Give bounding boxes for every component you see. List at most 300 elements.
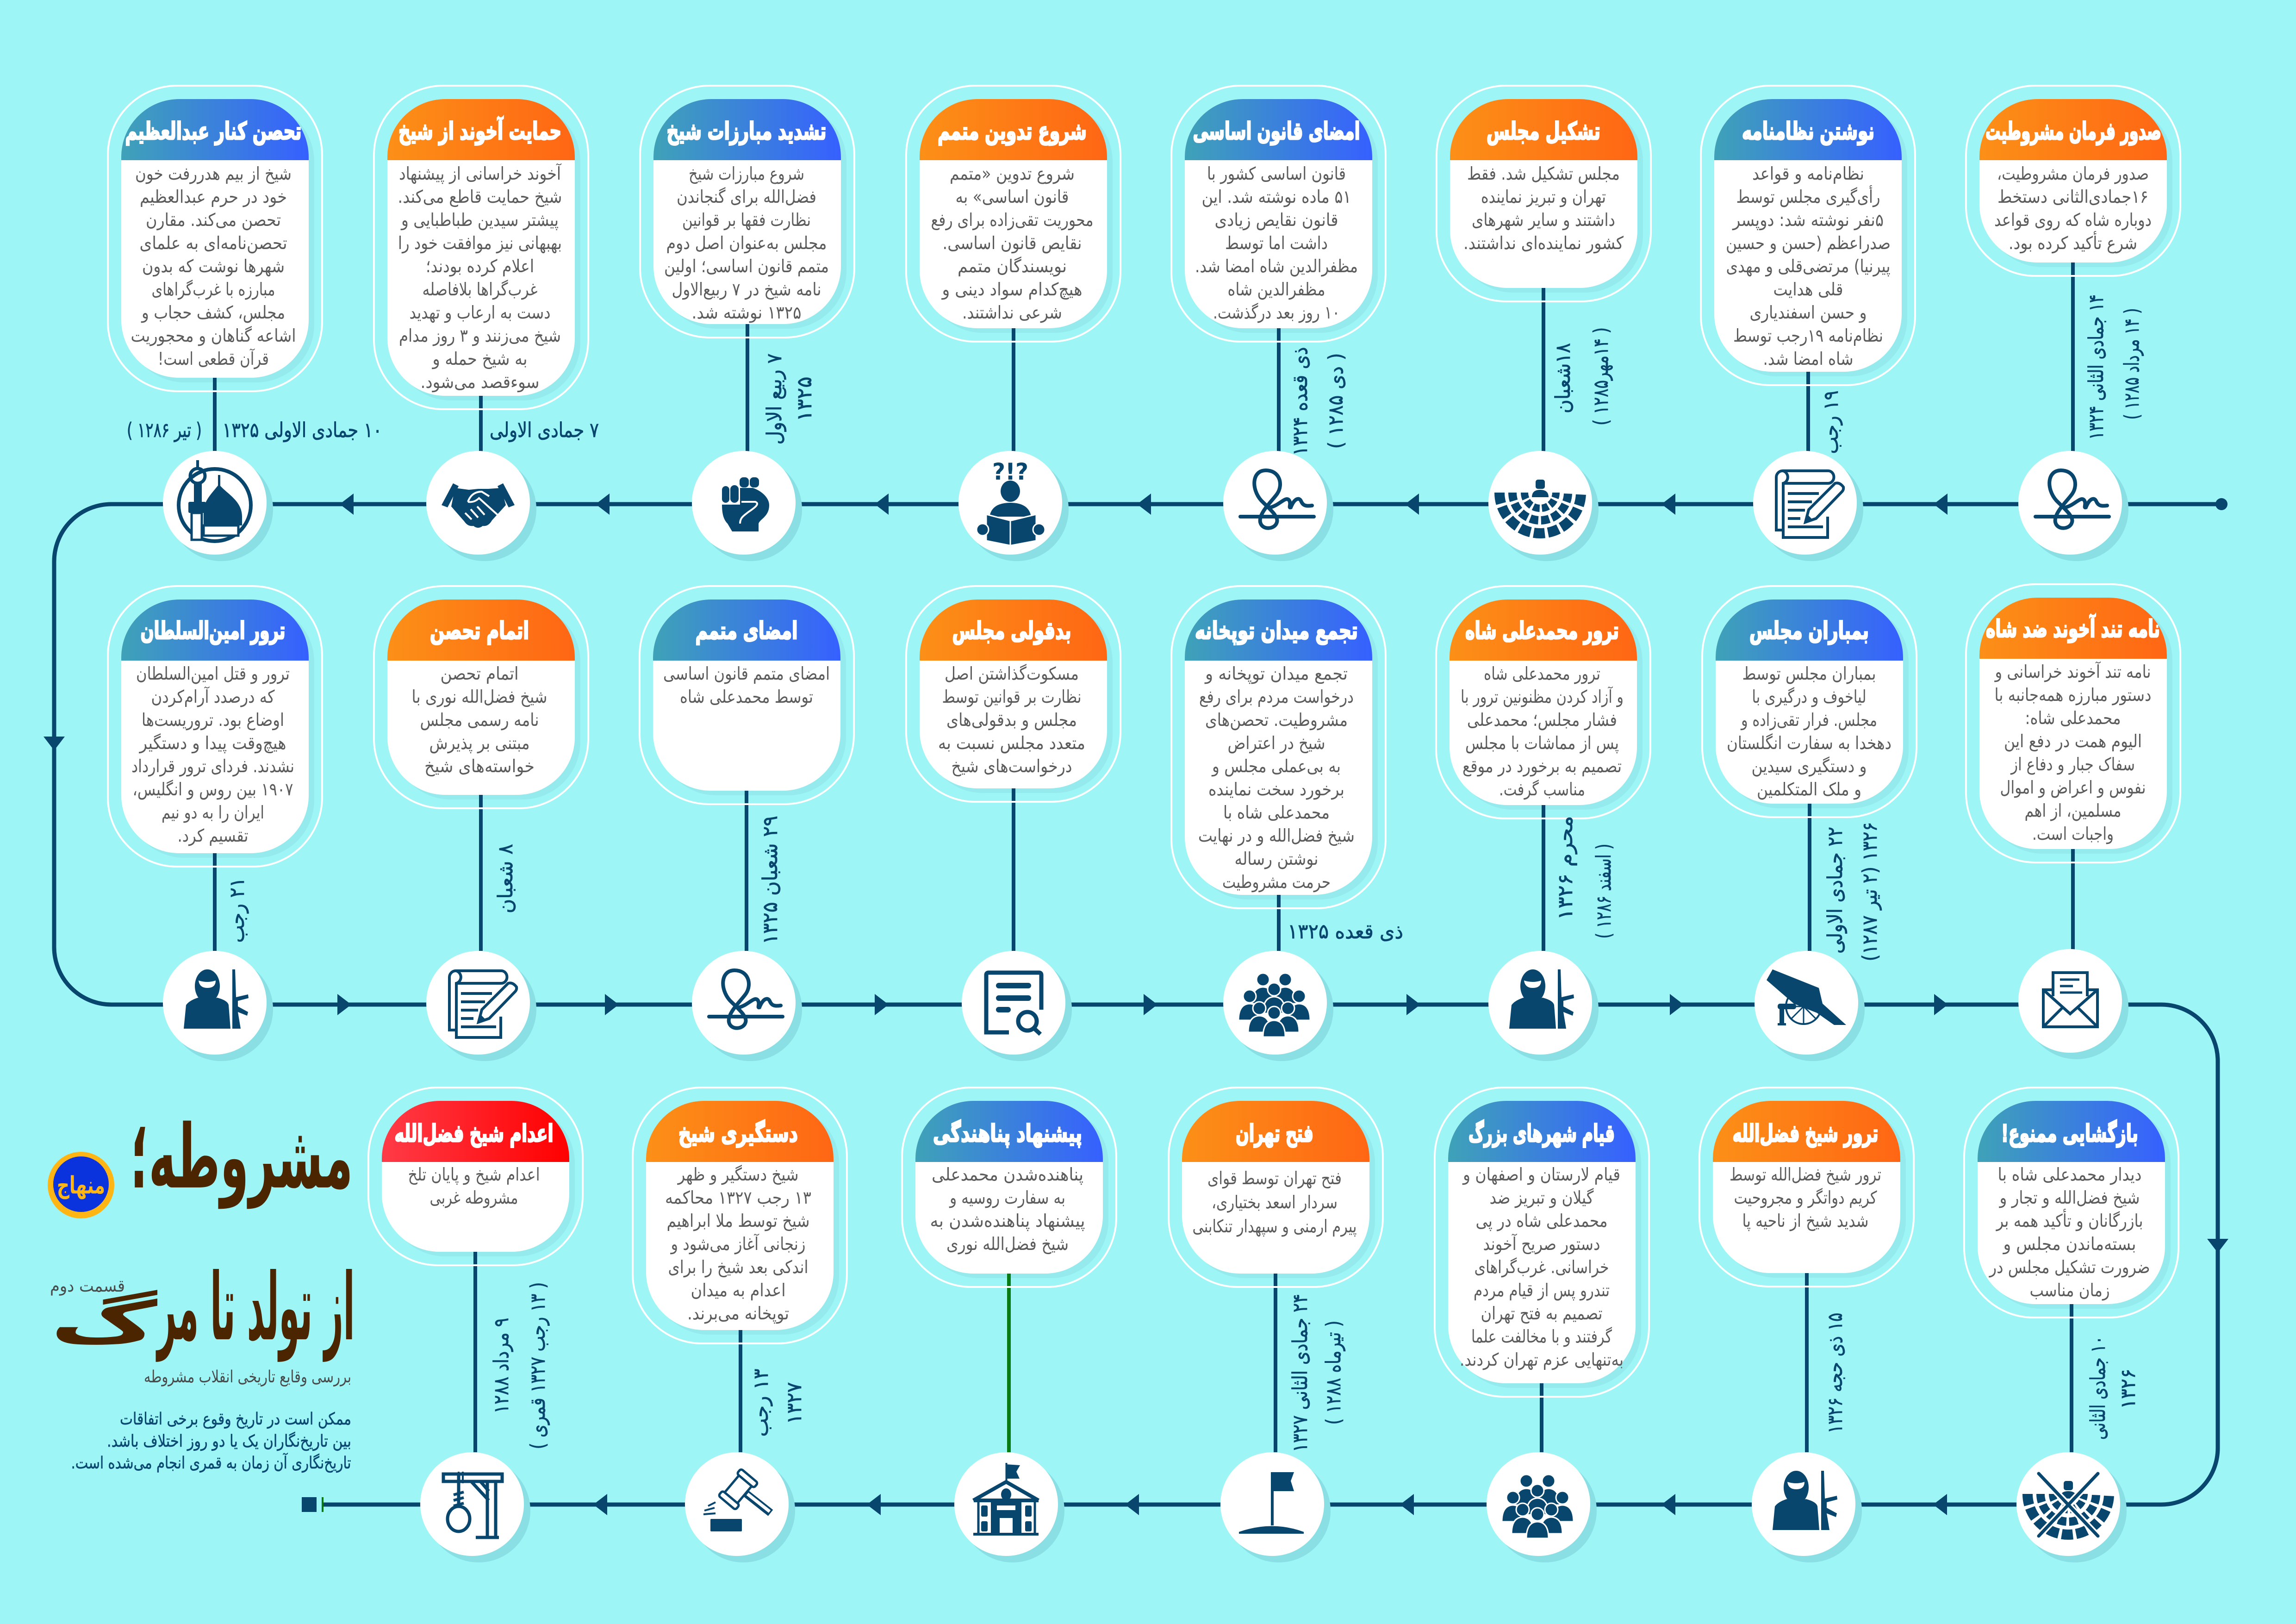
text block: ضرورت تشکیل مجلس در	[1989, 1257, 2150, 1278]
text block	[1461, 663, 1624, 800]
icon: masked gunman	[163, 951, 273, 1061]
text block: اوضاع بود. تروریست‌ها	[142, 710, 284, 731]
text block: اعدام به میدان	[691, 1280, 786, 1300]
text block	[408, 1164, 540, 1208]
heading: حمایت آخوند از شیخ	[398, 116, 561, 145]
text block: رأی‌گیری مجلس توسط	[1736, 185, 1880, 207]
logo	[48, 1152, 114, 1218]
text block: تندرو پس از قیام مردم	[1474, 1280, 1610, 1301]
icon: crowd	[1487, 1452, 1597, 1562]
icon: handshake	[426, 451, 536, 561]
panel: قیام شهرهای بزرگ	[1435, 1087, 1649, 1452]
date	[1551, 327, 1613, 425]
panel: تجمع میدان توپخانه	[1171, 586, 1386, 951]
date: ۲۱ رجب	[225, 878, 249, 943]
text block: صدور فرمان مشروطیت،	[1997, 163, 2149, 184]
date: ۷ جمادی الاولی	[490, 418, 599, 442]
date: ( تیر ۱۲۸۶ )	[127, 418, 202, 442]
icon: cannon	[1755, 951, 1865, 1061]
date	[127, 418, 382, 442]
heading: شروع تدوین متمم	[938, 118, 1087, 145]
text block	[931, 163, 1093, 323]
text block: شیخ در اعتراض	[1227, 733, 1325, 754]
panel: بازگشایی ممنوع!	[1964, 1087, 2178, 1452]
heading: بازگشایی ممنوع!	[2001, 1119, 2138, 1148]
text block: قانون اساسی» به	[955, 187, 1069, 207]
text block: شیخ فضل‌الله و تجار و	[1999, 1187, 2140, 1208]
icon: notepad and pencil	[426, 951, 536, 1061]
text block: مشروطه غربی	[429, 1187, 518, 1208]
text block: ترور محمدعلی شاه	[1484, 663, 1600, 684]
icon: crossed parliament	[2016, 1452, 2127, 1562]
text block: هیچ‌کدام سواد دینی و	[941, 279, 1082, 300]
text block: تصمیم به برخورد در موقع	[1462, 756, 1622, 777]
text block: آخوند خراسانی از پیشنهاد	[399, 163, 561, 184]
text block: قانون اساسی کشور با	[1207, 163, 1346, 184]
text block: الیوم همت در دفع این	[2004, 731, 2142, 752]
heading: فتح تهران	[1236, 1120, 1313, 1148]
text block: شرع تأکید کرده بود.	[2009, 231, 2137, 254]
panel: حمایت آخوند از شیخ	[374, 86, 588, 452]
timeline end marker	[302, 1497, 324, 1512]
text block: به سفارت روسیه و	[949, 1187, 1065, 1208]
text block: مسلمین، از اهم	[2024, 800, 2122, 821]
date: ذی قعده ۱۳۲۴	[1288, 347, 1312, 456]
heading	[1185, 99, 1372, 160]
text block: نقایص قانون اساسی.	[942, 233, 1082, 254]
date: ۲۴ جمادی الثانی ۱۳۲۷	[1288, 1294, 1312, 1452]
text block: و ملک المتکلمین	[1757, 779, 1861, 800]
text block: تصمیم به فتح تهران	[1481, 1303, 1602, 1324]
text block: پیرنیا) مرتضی‌قلی و مهدی	[1726, 256, 1890, 277]
text block	[131, 663, 294, 846]
note text block: تاریخ‌نگاری آن زمان به قمری انجام می‌شده است.	[71, 1452, 351, 1473]
text block: محمدعلی شاه:	[2025, 708, 2121, 728]
date: ۱۵ ذی حجه ۱۳۲۶	[1823, 1313, 1847, 1433]
text block: شیخ می‌زنند و ۳ روز مدام	[399, 325, 561, 346]
icon: document search	[962, 951, 1072, 1061]
text block: نظام‌نامه و قواعد	[1752, 163, 1864, 184]
date: ۲۲ جمادی الاولی	[1823, 827, 1847, 954]
date: ۱۳۲۷	[783, 1382, 806, 1424]
date	[1823, 822, 1882, 961]
panel: فتح تهران	[1169, 1087, 1383, 1452]
text block	[663, 663, 830, 707]
text block: ۱۳ رجب ۱۳۲۷ محاکمه	[665, 1187, 811, 1208]
icon: mosque	[163, 451, 273, 561]
title: گ	[50, 1289, 157, 1356]
text block: مجلس به‌عنوان اصل دوم	[666, 233, 827, 254]
text block: مجلس، کشف حجاب و	[141, 302, 285, 323]
icon: reader with question marks	[958, 451, 1069, 561]
panel: امضای متمم	[640, 586, 854, 951]
text block	[1198, 663, 1355, 893]
date	[1288, 1294, 1345, 1452]
icon: envelope	[2018, 949, 2128, 1059]
text block	[1727, 663, 1892, 800]
note text block: ممکن است در تاریخ وقوع برخی اتفاقات	[120, 1410, 351, 1429]
text block: فتح تهران توسط قوای	[1207, 1168, 1342, 1189]
date: ۱۰ جمادی الثانی	[2086, 1336, 2110, 1440]
text block: تقسیم کرد.	[178, 825, 248, 846]
icon: masked gunman	[1752, 1452, 1862, 1562]
text block: پیرم ارمنی و سپهدار تنکابنی	[1192, 1216, 1357, 1237]
date: ۱۰ جمادی الاولی ۱۳۲۵	[222, 418, 382, 442]
text block: اعلام کرده بودند؛	[426, 256, 534, 277]
text block: ۵نفر نوشته شد: دوپسر	[1732, 210, 1884, 231]
text block: نظارت فقها بر قوانین	[682, 210, 811, 231]
text block: سفاک جبار و دفاع از	[2010, 754, 2135, 775]
heading: اتمام تحصن	[430, 617, 529, 645]
icon: flag	[1220, 1452, 1331, 1562]
text block: مظفرالدین شاه	[1227, 279, 1325, 300]
text block: داشتند و سایر شهرهای	[1472, 210, 1615, 231]
panel: شروع تدوین متمم	[906, 86, 1120, 452]
arrow right vertical	[2207, 1239, 2228, 1253]
heading	[920, 99, 1107, 160]
text block: نامه شیخ در ۷ ربیع‌الاول	[672, 279, 821, 300]
text block: شیخ دستگیر و ظهر	[677, 1164, 799, 1185]
text block	[1726, 163, 1891, 369]
text block	[938, 663, 1085, 777]
text block	[398, 163, 562, 393]
date: ( ۱۳ رجب ۱۳۲۷ قمری )	[526, 1282, 550, 1449]
date: ۱۹ رجب	[1819, 391, 1843, 454]
text block: دیدار محمدعلی شاه با	[1997, 1164, 2142, 1185]
text block: شیخ حمایت قاطع می‌کند.	[398, 187, 562, 207]
text block: واجبات است.	[2032, 824, 2114, 844]
date: ۷ ربیع الاول	[763, 354, 786, 444]
text block: سوءقصد می‌شود.	[420, 372, 540, 393]
icon: gavel	[685, 1452, 795, 1562]
panel: نوشتن نظامنامه	[1701, 86, 1915, 452]
heading	[1450, 600, 1637, 661]
heading	[1450, 99, 1637, 160]
date: ۱۳۲۵	[793, 377, 816, 421]
date: ( تیرماه ۱۲۸۸ )	[1322, 1320, 1345, 1425]
date: ( اسفند ۱۲۸۶ )	[1592, 843, 1616, 939]
text block	[1730, 1164, 1881, 1231]
text block: درخواست‌های شیخ	[952, 756, 1072, 777]
text block: تهران و تبریز نماینده	[1481, 187, 1606, 207]
text block: قانون نقایص زیادی	[1214, 210, 1338, 231]
date: ( ۱۴ مرداد ۱۲۸۵ )	[2120, 308, 2144, 419]
text block: محمدعلی شاه در پی	[1475, 1211, 1608, 1231]
text block	[1994, 661, 2151, 844]
text block: متعدد مجلس نسبت به	[938, 733, 1085, 753]
heading: تحصن کنار عبدالعظیم	[125, 118, 302, 145]
arrow row 1	[340, 493, 1948, 515]
icon: crowd	[1223, 951, 1333, 1061]
panel: تشدید مبارزات شیخ	[640, 86, 854, 452]
arrow row 3	[593, 1494, 1947, 1515]
text block	[1195, 163, 1358, 323]
date: ( ۱۴مهر۱۲۸۵ )	[1589, 327, 1613, 425]
title: مشروطه؛	[131, 1106, 353, 1209]
text block: قرآن قطعی است!	[158, 348, 269, 369]
text block: ۵۱ ماده نوشته شد. این	[1201, 187, 1351, 207]
text block: زنجانی آغاز می‌شود و	[670, 1233, 805, 1255]
panel: ترور محمدعلی شاه	[1436, 586, 1650, 951]
text block: صدراعظم (حسن و حسین	[1726, 233, 1891, 254]
subtitle: بررسی وقایع تاریخی انقلاب مشروطه	[144, 1368, 351, 1387]
heading	[646, 1101, 834, 1162]
icon: signature	[1223, 451, 1333, 561]
heading: صدور فرمان مشروطیت	[1985, 118, 2161, 145]
text block: شروع تدوین «متمم	[950, 163, 1075, 184]
heading	[653, 600, 840, 661]
text block: فشار مجلس؛ محمدعلی	[1467, 710, 1617, 730]
text block: نویسندگان متمم	[958, 256, 1067, 277]
heading: ترور محمدعلی شاه	[1465, 617, 1619, 645]
text block: شیخ توسط ملا ابراهیم	[666, 1211, 810, 1231]
text block: تحصن‌نامه‌ای به علمای	[140, 233, 287, 254]
text block: اتمام تحصن	[441, 663, 518, 684]
icon: raised fist	[692, 451, 802, 561]
text block: که درصدد آرام‌کردن	[151, 686, 275, 707]
text block: به شیخ حمله و	[432, 349, 528, 369]
heading: اعدام شیخ فضل‌الله	[394, 1120, 554, 1148]
text block: خود در حرم عبدالعظیم	[140, 187, 287, 207]
text block: بمباران مجلس توسط	[1742, 663, 1876, 684]
date: ۱۴ جمادی الثانی ۱۳۲۴	[2084, 294, 2108, 440]
date: ۲۹ شعبان ۱۳۲۵	[759, 816, 782, 944]
text block: کریم دواتگر و مجروحیت	[1734, 1187, 1877, 1208]
text block: امضای متمم قانون اساسی	[663, 663, 830, 684]
text block: دهخدا به سفارت انگلستان	[1727, 733, 1892, 753]
date: ۱۳۲۶ (۲ تیر ۱۲۸۷)	[1858, 822, 1882, 961]
icon: signature	[2018, 451, 2128, 561]
heading	[920, 600, 1107, 661]
date	[2086, 1336, 2140, 1440]
panel: امضای قانون اساسی	[1171, 86, 1386, 452]
text block: اندکی بعد شیخ را برای	[668, 1257, 808, 1278]
arrow row 2	[337, 994, 1948, 1015]
timeline path	[54, 504, 2221, 1505]
panel: تحصن کنار عبدالعظیم	[108, 86, 322, 452]
text block: مسکوت‌گذاشتن اصل	[945, 663, 1079, 684]
text block: لیاخوف و درگیری با	[1752, 687, 1866, 707]
text block: گیلان و تبریز ضد	[1489, 1187, 1594, 1208]
icon: masked gunman	[1488, 951, 1599, 1061]
text block: غرب‌گراها بلافاصله	[422, 279, 538, 300]
text block	[1192, 1168, 1357, 1237]
heading	[1448, 1101, 1636, 1162]
text block	[131, 163, 296, 369]
text block: فضل‌الله برای گنجاندن	[677, 187, 816, 207]
text block: پناهنده‌شدن محمدعلی	[932, 1164, 1083, 1185]
text block: پس از مماشات با مجلس	[1465, 733, 1619, 753]
text block: ۱۶جمادی‌الثانی دستخط	[1997, 187, 2148, 207]
text block: مجلس. فرار تقی‌زاده و	[1740, 710, 1877, 731]
icon: school building	[954, 1452, 1064, 1562]
heading	[1182, 1101, 1369, 1162]
subtitle: part two: قسمت دوم	[50, 1277, 125, 1296]
heading	[1979, 99, 2167, 160]
text block: ایران را به دو نیم	[162, 802, 264, 823]
text block	[412, 663, 547, 777]
icon: signature	[692, 951, 802, 1061]
date	[2084, 294, 2144, 440]
heading: نوشتن نظامنامه	[1742, 118, 1874, 145]
date: ۱۸شعبان	[1551, 343, 1575, 413]
date: ۱۳۲۶	[2116, 1368, 2140, 1409]
date	[749, 1368, 806, 1437]
date: محرم ۱۳۲۶	[1554, 816, 1577, 920]
text block: دستور مبارزه همه‌جانبه با	[1995, 685, 2151, 706]
date: ۹ مرداد ۱۲۸۸	[490, 1318, 513, 1414]
text block: درخواست مردم برای رفع	[1199, 687, 1354, 707]
text block: محوریت تقی‌زاده برای رفع	[931, 210, 1093, 231]
heading: پیشنهاد پناهندگی	[933, 1119, 1082, 1148]
text block: و دستگیری سیدین	[1751, 756, 1867, 777]
text block: تحصن می‌کند. مقارن	[146, 210, 281, 231]
panel: دستگیری شیخ	[633, 1087, 847, 1452]
text block: ۱۳۲۵ نوشته شد.	[691, 302, 802, 323]
text block: پیشنهاد پناهنده‌شدن به	[930, 1211, 1085, 1231]
text block: مبارزه با غرب‌گراهای	[152, 279, 275, 300]
text block: محمدعلی شاه با	[1223, 802, 1330, 823]
heading: بمباران مجلس	[1749, 617, 1869, 645]
timeline start dot	[2215, 498, 2228, 510]
text block: مظفرالدین شاه امضا شد.	[1195, 256, 1358, 277]
heading	[387, 600, 575, 661]
text block: نظام‌نامه ۱۹رجب توسط	[1733, 325, 1883, 346]
text block: دستور صریح آخوند	[1483, 1233, 1600, 1255]
text block: برخورد سخت نماینده	[1208, 779, 1344, 800]
heading	[653, 99, 841, 160]
heading	[1185, 600, 1372, 661]
text block: نشدند. فردای ترور قرارداد	[131, 756, 294, 777]
text block: ترور شیخ فضل‌الله توسط	[1730, 1164, 1881, 1185]
heading	[387, 99, 575, 160]
date: ( دی ۱۲۸۵ )	[1324, 353, 1348, 449]
text block	[1463, 163, 1624, 254]
text block: ۱۰ روز بعد درگذشت.	[1213, 302, 1340, 323]
panel: تشکیل مجلس	[1437, 86, 1651, 452]
date	[763, 354, 816, 444]
arrow left vertical	[44, 737, 65, 750]
heading: ترور امین‌السلطان	[141, 617, 285, 645]
text block	[1989, 1164, 2150, 1300]
text block	[930, 1164, 1085, 1255]
text block: و آزاد کردن مظنونین ترور با	[1461, 686, 1624, 707]
note text block	[71, 1410, 351, 1473]
heading: تشکیل مجلس	[1487, 118, 1600, 145]
text block: ترور و قتل امین‌السلطان	[136, 663, 290, 684]
text block: به‌تنهایی عزم تهران کردند.	[1460, 1349, 1624, 1370]
text block	[665, 1164, 811, 1324]
text block	[1460, 1164, 1624, 1370]
text block: نوشتن رساله	[1235, 849, 1318, 869]
icon: notepad and pencil	[1753, 451, 1863, 561]
panel: ترور شیخ فضل‌الله	[1699, 1087, 1914, 1452]
text block: تجمع میدان توپخانه و	[1204, 663, 1348, 684]
text block: بازرگانان و تأکید همه بر	[1996, 1209, 2143, 1231]
icon: parliament	[1488, 451, 1599, 561]
date	[490, 1282, 550, 1449]
heading: نامه تند آخوند ضد شاه	[1986, 614, 2160, 643]
text block: اعدام شیخ و پایان تلخ	[408, 1164, 540, 1185]
logo: منهاج	[57, 1172, 105, 1199]
text block: توپخانه می‌برند.	[687, 1303, 789, 1324]
panel: اتمام تحصن	[374, 586, 588, 951]
text block: شیخ فضل‌الله نوری با	[412, 687, 547, 707]
heading: امضای قانون اساسی	[1193, 118, 1360, 145]
heading	[915, 1101, 1103, 1162]
text block: شیخ فضل‌الله و در نهایت	[1198, 825, 1355, 846]
text block: شروع مبارزات شیخ	[689, 163, 804, 184]
heading: امضای متمم	[695, 617, 798, 645]
panel: پیشنهاد پناهندگی	[902, 1087, 1116, 1452]
text block: شهرها نوشت که بدون	[142, 256, 285, 277]
text block: سردار اسعد بختیاری،	[1212, 1192, 1338, 1213]
text block	[1994, 163, 2152, 254]
text block: شیخ فضل‌الله نوری	[946, 1234, 1069, 1255]
heading: تجمع میدان توپخانه	[1195, 617, 1358, 645]
text block: پیشتر سیدین طباطبایی و	[400, 210, 559, 231]
text block: به بی‌عملی مجلس و	[1211, 756, 1341, 777]
heading	[1714, 99, 1902, 160]
heading: تشدید مبارزات شیخ	[666, 118, 827, 145]
icon: gallows	[420, 1452, 530, 1562]
panel: صدور فرمان مشروطیت	[1966, 86, 2180, 452]
text block: متمم قانون اساسی؛ اولین	[664, 256, 829, 277]
text block: مجلس تشکیل شد. فقط	[1467, 163, 1620, 184]
date: ۱۳ رجب	[749, 1368, 773, 1437]
date	[1554, 816, 1616, 939]
heading	[121, 99, 309, 160]
text block: مناسب گرفت.	[1499, 779, 1585, 800]
text block: حرمت مشروطیت	[1222, 872, 1331, 893]
text block: اشاعه گناهان و محجوریت	[131, 325, 296, 346]
date: ذی قعده ۱۳۲۵	[1288, 920, 1403, 943]
panel: اعدام شیخ فضل‌الله	[368, 1087, 583, 1452]
text block: بهبهانی نیز موافقت خود را	[398, 233, 562, 254]
panel: بدقولی مجلس	[906, 586, 1120, 951]
text block: بسته‌ماندن مجلس و	[2003, 1234, 2136, 1255]
text block: شدید شیخ از ناحیه پا	[1742, 1211, 1869, 1231]
note text block: بین تاریخ‌نگاران یک یا دو روز اختلاف باشد.	[107, 1431, 351, 1451]
text block: هیچ‌وقت پیدا و دستگیر	[139, 733, 286, 754]
heading: قیام شهرهای بزرگ	[1468, 1119, 1615, 1148]
text block: شیخ از بیم هدررفت خون	[135, 163, 292, 184]
text block: شاه امضا شد.	[1763, 349, 1853, 369]
text block: ۱۹۰۷ بین روس و انگلیس،	[132, 779, 293, 800]
text block: زمان مناسب	[2030, 1280, 2109, 1300]
text block: توسط محمدعلی شاه	[680, 687, 813, 707]
text block: نفوس و اعراض و اموال	[2000, 777, 2146, 798]
heading: دستگیری شیخ	[678, 1119, 798, 1148]
text block: مجلس و بدقولی‌های	[946, 710, 1077, 731]
date	[1288, 347, 1348, 456]
panel: نامه تند آخوند ضد شاه	[1966, 584, 2180, 951]
text block: داشت اما توسط	[1225, 233, 1328, 254]
text block: گرفتند و با مخالفت علما	[1471, 1326, 1612, 1347]
text block: شرعی نداشتند.	[962, 302, 1062, 323]
date: ۸ شعبان	[494, 844, 517, 913]
text block: خراسانی. غرب‌گراهای	[1475, 1257, 1609, 1278]
title	[50, 1106, 355, 1362]
heading: بدقولی مجلس	[952, 617, 1071, 645]
text block	[664, 163, 829, 323]
text block: مشروطیت. تحصن‌های	[1205, 710, 1348, 731]
panel: بمباران مجلس	[1702, 586, 1916, 951]
text block: کشور نماینده‌ای نداشتند.	[1463, 233, 1624, 254]
text block: خواسته‌های شیخ	[424, 756, 535, 777]
text block: قلی هدایت	[1773, 279, 1843, 300]
heading	[1978, 1101, 2165, 1162]
